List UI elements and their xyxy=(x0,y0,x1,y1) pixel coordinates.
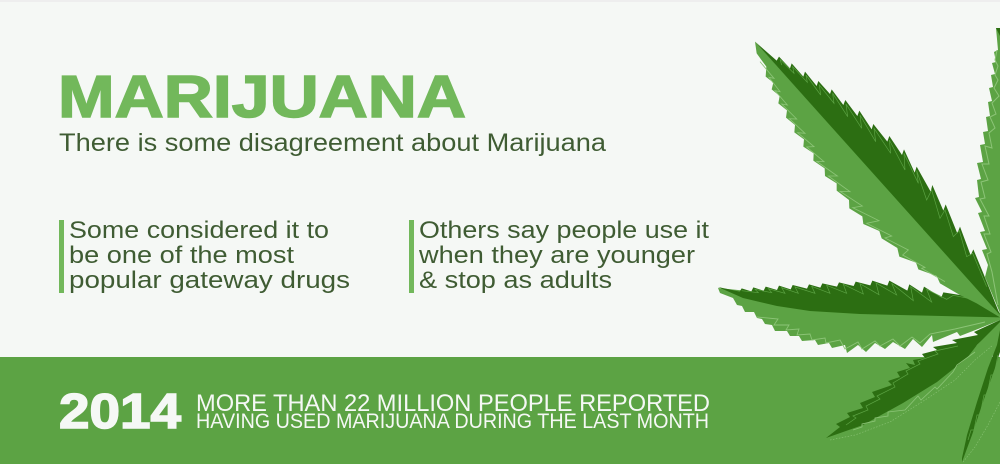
leaf: bottom leaflet xyxy=(962,330,1000,462)
icon: cannabis leaf xyxy=(718,28,1000,462)
banner statistic text xyxy=(196,390,710,433)
left leaflet light half xyxy=(718,288,1000,353)
left statement xyxy=(59,217,350,294)
left statement text: Some considered it to xyxy=(69,217,329,244)
left statement text: be one of the most xyxy=(69,242,294,269)
right statement text: & stop as adults xyxy=(419,267,612,294)
right accent bar xyxy=(409,220,414,293)
subtitle: There is some disagreement about Marijuana xyxy=(59,129,606,157)
left leaflet dark half xyxy=(718,281,1000,317)
left statement text xyxy=(69,217,350,294)
leaf: lower left leaflet xyxy=(826,320,1000,440)
leaf: upper right leaflet xyxy=(975,28,1000,313)
leaf: left leaflet xyxy=(718,281,1000,353)
left accent bar xyxy=(59,220,64,293)
leaf: upper left leaflet xyxy=(755,42,1000,318)
upper left leaflet light half xyxy=(755,42,1000,318)
right statement xyxy=(409,217,709,294)
title: MARIJUANA xyxy=(58,64,466,130)
bottom banner background xyxy=(0,357,1000,464)
right statement text: when they are younger xyxy=(418,242,695,269)
right statement text: Others say people use it xyxy=(419,217,709,244)
banner year: 2014 xyxy=(59,385,181,439)
banner statistic text: HAVING USED MARIJUANA DURING THE LAST MONTH xyxy=(196,409,709,433)
left statement text: popular gateway drugs xyxy=(69,267,350,294)
right statement text xyxy=(418,217,709,294)
banner statistic text: MORE THAN 22 MILLION PEOPLE REPORTED xyxy=(196,390,710,417)
upper left leaflet dark half xyxy=(755,42,1000,315)
